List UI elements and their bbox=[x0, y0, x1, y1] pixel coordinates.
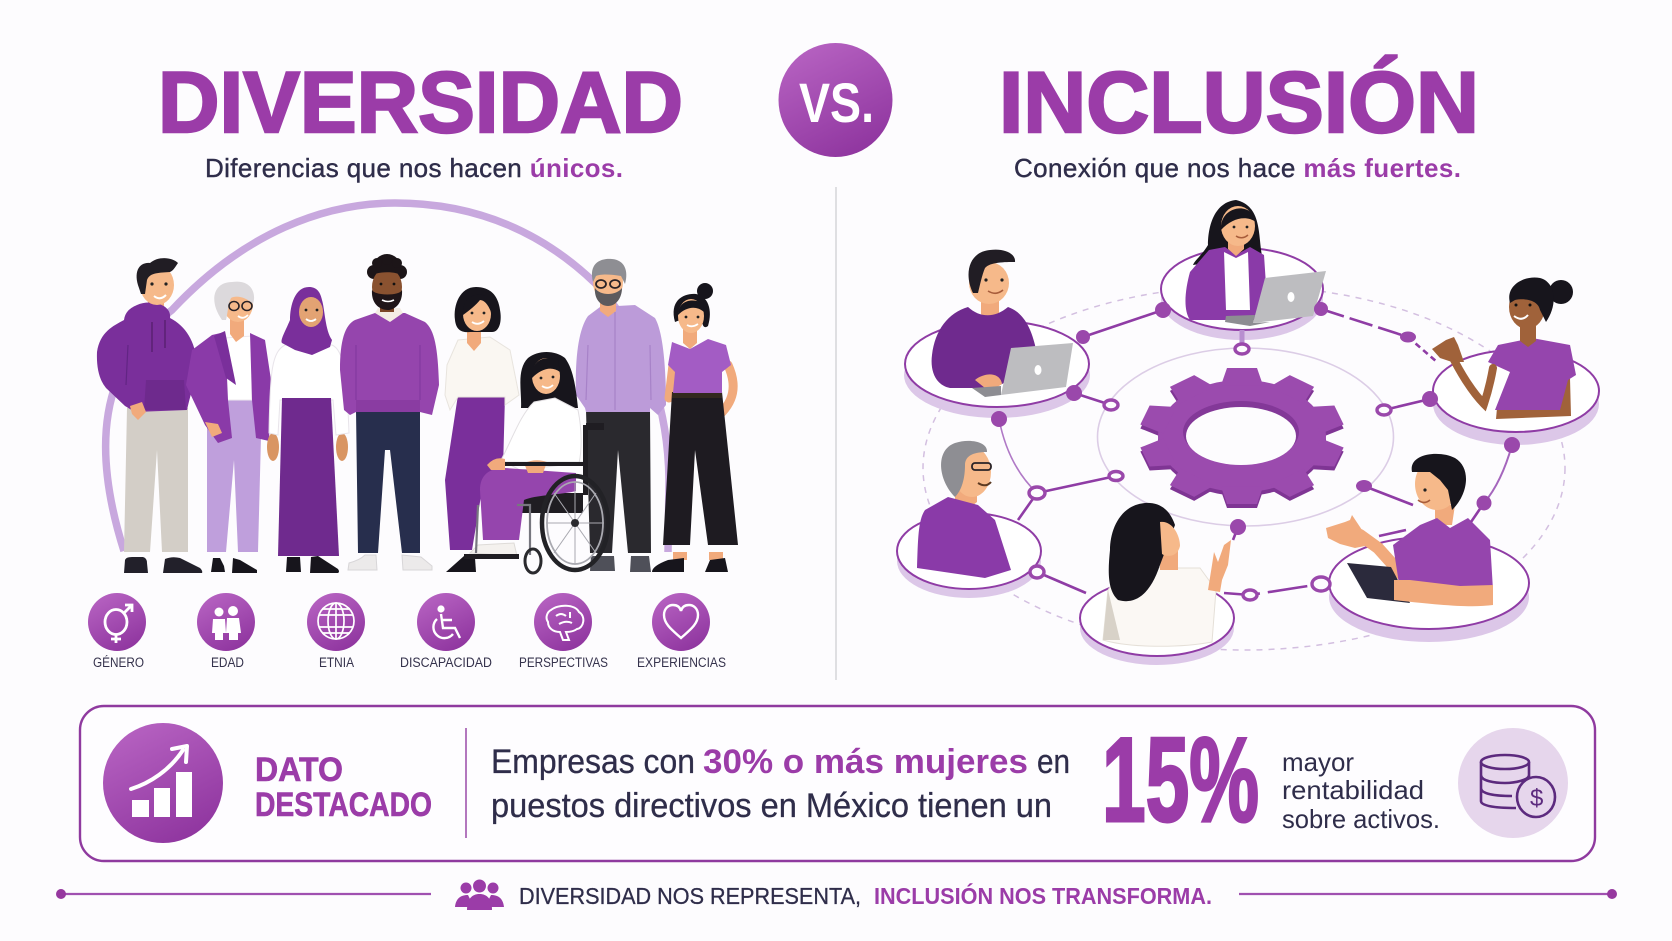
stat description: mayor bbox=[1282, 747, 1354, 777]
person: older woman in blazer bbox=[186, 282, 271, 573]
stat description: rentabilidad bbox=[1282, 775, 1424, 805]
person: woman with bob hair bbox=[445, 287, 519, 572]
tagline text: INCLUSIÓN NOS TRANSFORMA. bbox=[874, 882, 1212, 909]
statement text bbox=[491, 743, 1070, 825]
icon: perspectivas: PERSPECTIVAS bbox=[519, 655, 608, 670]
panel: dato destacado bbox=[80, 706, 1595, 861]
person platform: man with tablet bbox=[1326, 454, 1529, 642]
person: woman in hijab bbox=[267, 287, 349, 573]
person platform: man with laptop bbox=[904, 250, 1090, 418]
statement text: puestos directivos en México tienen un bbox=[491, 787, 1052, 825]
icon: growth chart bbox=[103, 723, 223, 843]
icon: coins bbox=[1458, 728, 1568, 838]
subtitle: Diversidad: Diferencias que nos hacen únicos. bbox=[205, 153, 623, 183]
arch behind group bbox=[106, 203, 669, 552]
heading: dato destacado: DESTACADO bbox=[255, 786, 432, 824]
person: woman in wheelchair bbox=[464, 352, 608, 573]
footer tagline bbox=[56, 880, 1617, 910]
stat description bbox=[1282, 747, 1440, 834]
person: man in hoodie bbox=[97, 258, 202, 573]
title: Diversidad: DIVERSIDAD bbox=[158, 55, 683, 151]
title: Inclusión: INCLUSIÓN bbox=[999, 55, 1479, 151]
person platform: man with glasses bbox=[897, 441, 1041, 598]
tagline text: DIVERSIDAD NOS REPRESENTA, bbox=[519, 883, 861, 909]
icon: experiencias bbox=[637, 593, 726, 670]
tagline text bbox=[519, 882, 1212, 909]
icon: people group bbox=[455, 880, 504, 910]
connectors and nodes bbox=[991, 302, 1520, 600]
statement text: en bbox=[1037, 743, 1070, 781]
person platform: woman in white bbox=[1080, 503, 1234, 665]
icon: coins: $ bbox=[1530, 785, 1543, 812]
person: Black man in purple sweater bbox=[340, 254, 439, 570]
badge: VS. bbox=[778, 43, 892, 157]
stat description: sobre activos. bbox=[1282, 804, 1440, 834]
icon: género bbox=[88, 593, 146, 670]
heading: dato destacado: DATO bbox=[255, 751, 343, 789]
badge: VS.: VS. bbox=[799, 71, 874, 134]
person platform: woman gesturing right bbox=[1432, 277, 1599, 445]
icon: discapacidad: DISCAPACIDAD bbox=[400, 655, 492, 670]
icon: edad: EDAD bbox=[211, 655, 244, 670]
person: older man with gray hair bbox=[576, 259, 666, 572]
icon row: dimensions of diversity bbox=[88, 593, 726, 670]
icon: etnia bbox=[307, 593, 365, 670]
icon: central gear bbox=[1139, 368, 1345, 508]
subtitle: Inclusión: Conexión que nos hace más fuertes. bbox=[1014, 153, 1461, 183]
icon: género: GÉNERO bbox=[93, 655, 144, 670]
heading: dato destacado bbox=[255, 751, 432, 824]
illustration: inclusion network around gear bbox=[897, 200, 1599, 665]
person: woman with bun bbox=[652, 283, 738, 572]
icon: experiencias: EXPERIENCIAS bbox=[637, 655, 726, 670]
stat: 15%: 15% bbox=[1102, 713, 1259, 847]
illustration: diverse group of people bbox=[97, 203, 738, 573]
icon: perspectivas bbox=[519, 593, 608, 670]
person platform: woman with laptop bbox=[1161, 200, 1326, 340]
statement text: 30% o más mujeres bbox=[703, 743, 1028, 781]
statement text: Empresas con bbox=[491, 743, 695, 781]
icon: etnia: ETNIA bbox=[319, 655, 354, 670]
icon: edad bbox=[197, 593, 255, 670]
icon: discapacidad bbox=[400, 593, 492, 670]
